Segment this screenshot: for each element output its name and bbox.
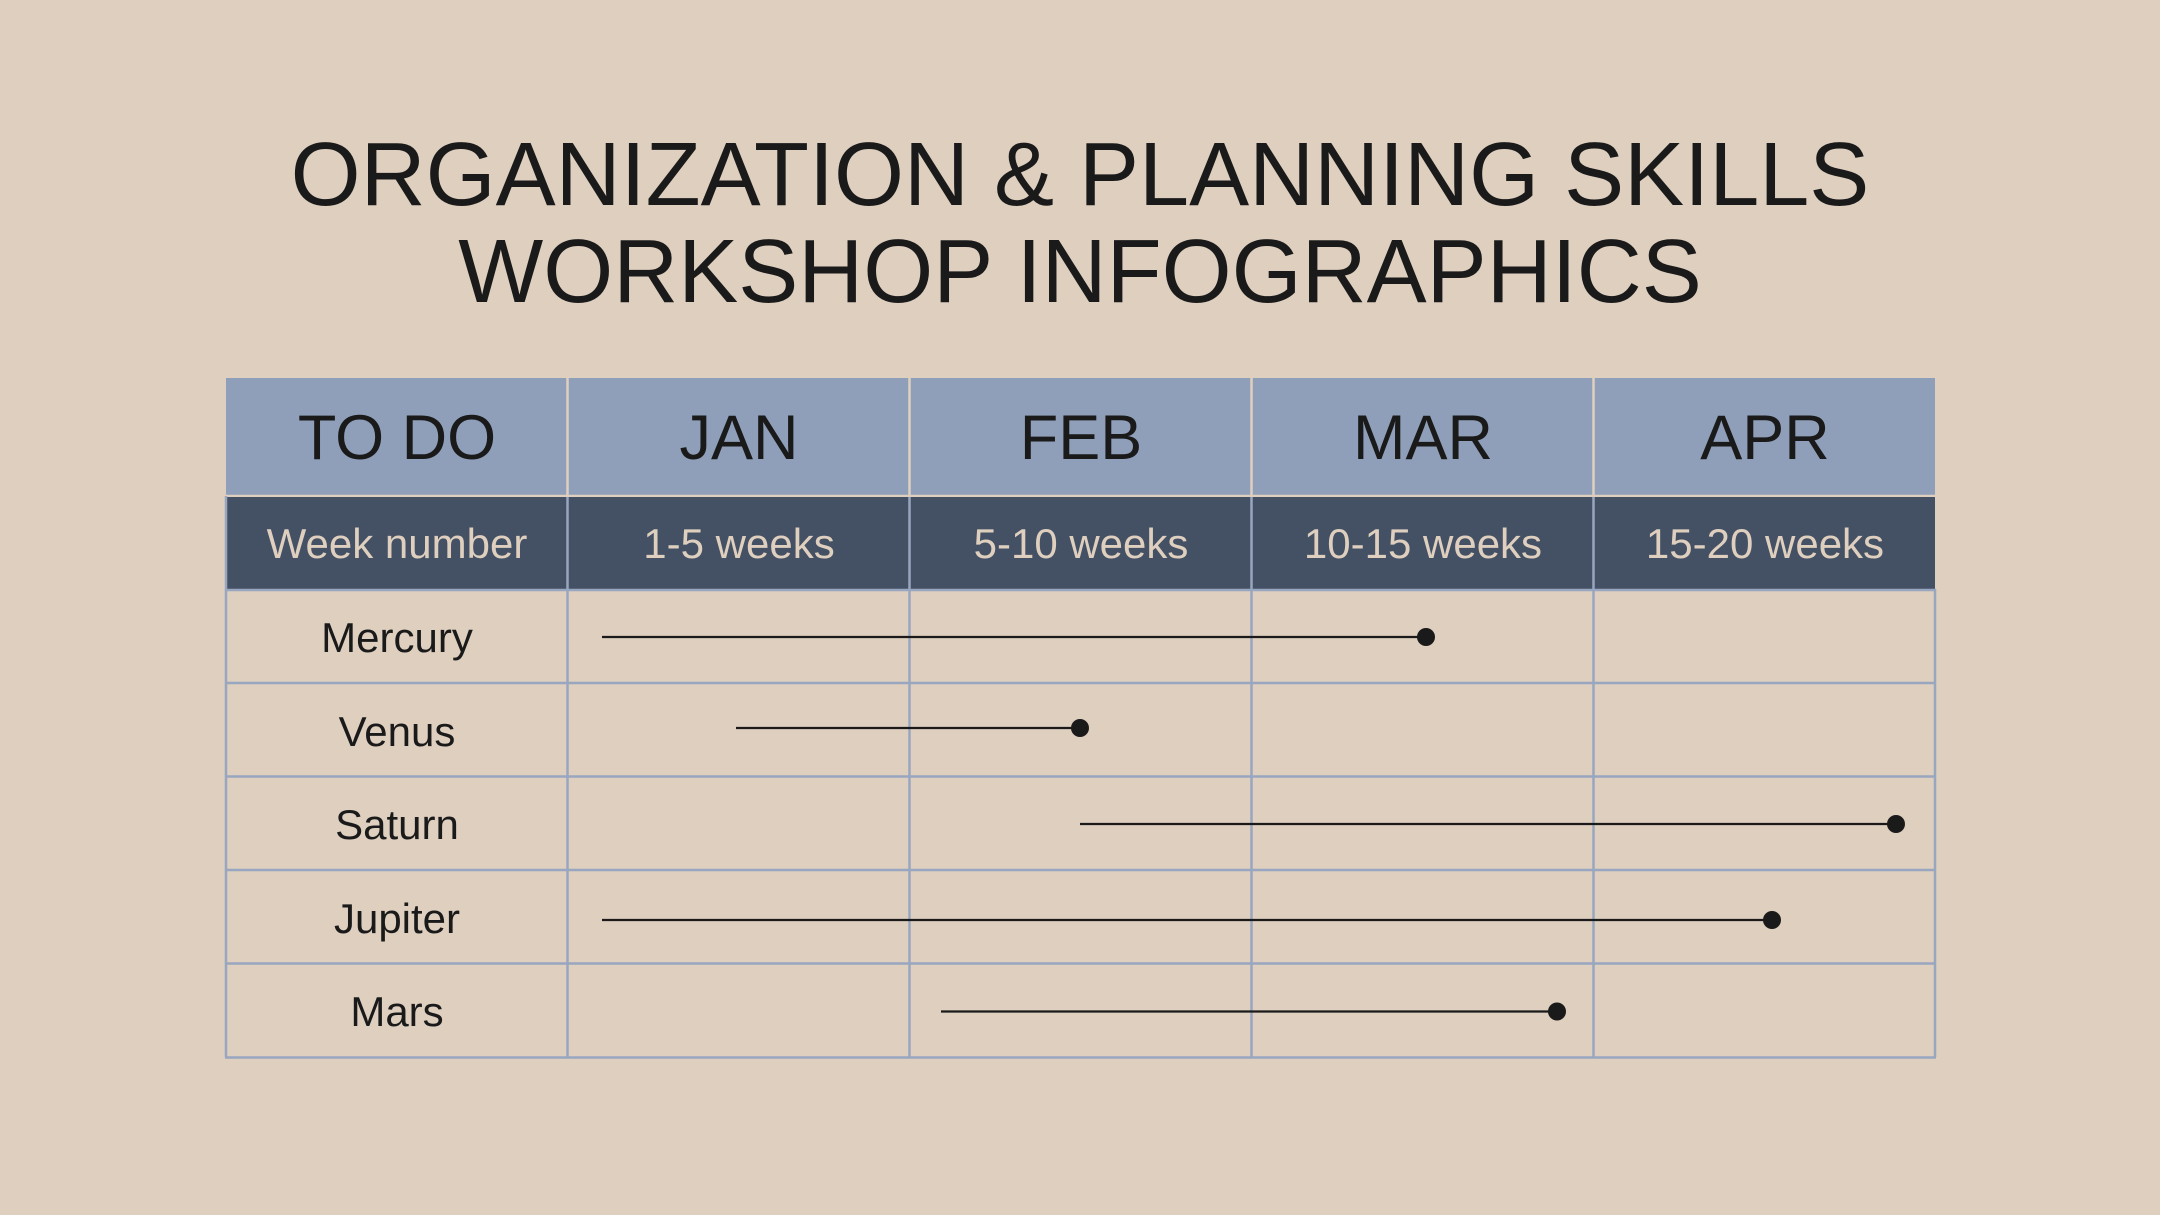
task row: Jupiter: Jupiter <box>334 895 460 942</box>
header row: months <box>226 378 1935 496</box>
task row: Mercury <box>321 614 1435 661</box>
title <box>291 125 1869 322</box>
title: WORKSHOP INFOGRAPHICS <box>458 222 1702 322</box>
subheader row: week numbers: 5-10 weeks <box>974 520 1188 567</box>
header row: months: TO DO <box>298 403 496 473</box>
subheader row: week numbers: 15-20 weeks <box>1646 520 1884 567</box>
table: planning schedule <box>225 378 1936 1058</box>
task row: Saturn <box>335 801 1905 848</box>
subheader row: week numbers: 10-15 weeks <box>1304 520 1542 567</box>
task row: Mars <box>350 988 1566 1035</box>
title: ORGANIZATION & PLANNING SKILLS <box>291 125 1869 225</box>
subheader row: week numbers: Week number <box>267 520 527 567</box>
task row: Venus: Venus <box>339 708 455 755</box>
subheader row: week numbers: 1-5 weeks <box>643 520 835 567</box>
task row: Mars: Mars <box>350 988 444 1035</box>
header row: months: APR <box>1700 403 1830 473</box>
task row: Mercury: Mercury <box>321 614 473 661</box>
subheader row: week numbers <box>226 497 1935 589</box>
task row: Jupiter <box>334 895 1781 942</box>
header row: months: FEB <box>1020 403 1142 473</box>
header row: months: JAN <box>679 403 799 473</box>
task row: Venus <box>339 708 1089 755</box>
table grid lines <box>225 496 1936 1058</box>
header row: months: MAR <box>1353 403 1493 473</box>
task row: Saturn: Saturn <box>335 801 459 848</box>
